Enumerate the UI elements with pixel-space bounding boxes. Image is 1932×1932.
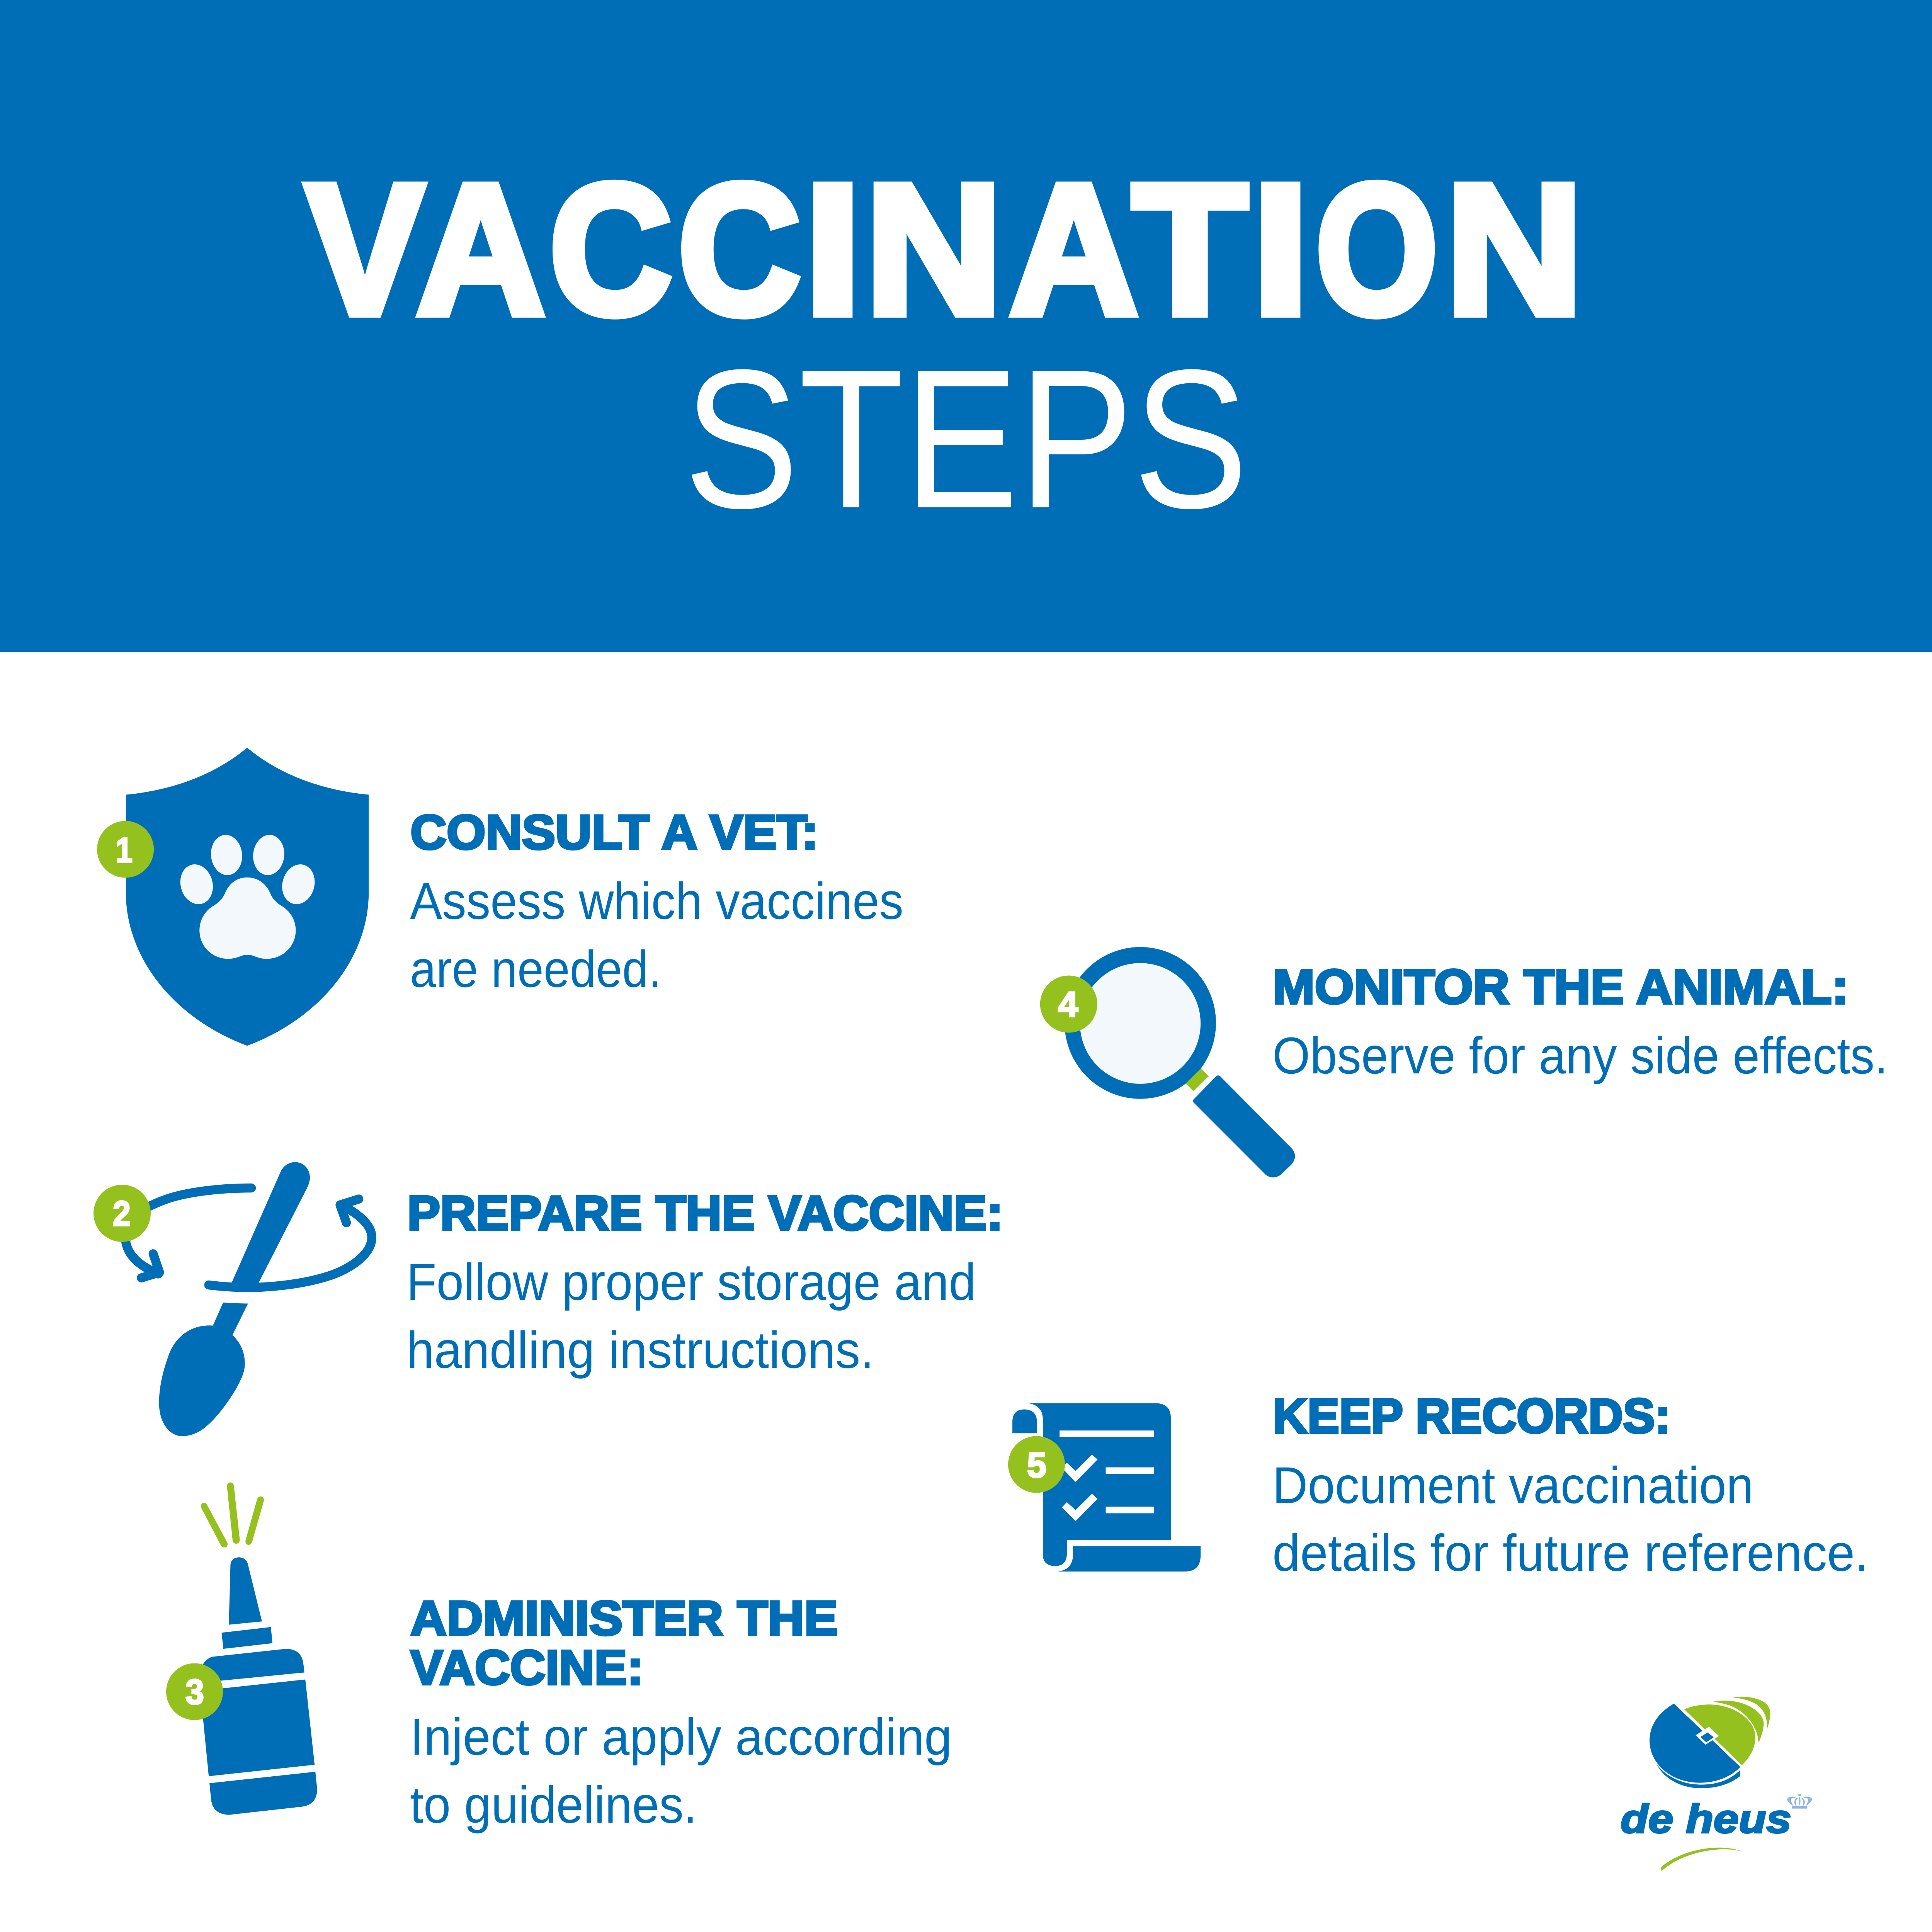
logo wordmark: de heus xyxy=(1621,1797,1791,1842)
title: vaccination: T xyxy=(1133,145,1247,353)
badge: number 3: 3 xyxy=(185,1672,204,1712)
badge: number 3 xyxy=(166,1663,223,1720)
badge: number 2 xyxy=(94,1185,151,1242)
step 1: consult a vet xyxy=(97,748,903,1046)
title: vaccination: O xyxy=(1316,145,1438,353)
badge: number 1 xyxy=(97,821,154,878)
text: observe for side effects: Observe for any side effects. xyxy=(1272,1027,1888,1085)
step 4: monitor the animal xyxy=(1040,947,1888,1177)
heading: consult a vet: CONSULT A VET: xyxy=(410,805,818,859)
heading: prepare the vaccine: PREPARE THE VACCINE: xyxy=(407,1186,1003,1240)
text: are needed: are needed. xyxy=(410,940,662,998)
text: assess vaccines: Assess which vaccines xyxy=(410,872,903,930)
title: vaccination: V xyxy=(306,145,425,353)
heading line 2: VACCINE: xyxy=(410,1640,643,1695)
title: vaccination: N xyxy=(1446,145,1583,353)
title: vaccination: C xyxy=(549,145,672,353)
icon: document scroll xyxy=(1012,1403,1201,1571)
title: vaccination: N xyxy=(865,145,1003,353)
title: steps: STEPS xyxy=(684,328,1248,549)
text: handling instructions: handling instructions. xyxy=(406,1321,874,1379)
badge: number 1: 1 xyxy=(116,831,133,870)
step 3: administer the vaccine xyxy=(166,1482,952,1834)
heading: monitor the animal: MONITOR THE ANIMAL: xyxy=(1273,959,1849,1014)
step 5: keep records xyxy=(1008,1389,1869,1582)
text: follow proper storage: Follow proper storage and xyxy=(406,1253,976,1311)
title: vaccination: C xyxy=(678,145,801,353)
logo crown xyxy=(1787,1794,1812,1809)
text: inject or apply: Inject or apply according xyxy=(410,1708,952,1766)
badge: number 4: 4 xyxy=(1058,985,1078,1024)
title: vaccination: I xyxy=(1252,145,1310,353)
heading: keep records: KEEP RECORDS: xyxy=(1273,1389,1671,1443)
text: details for future reference: details for future reference. xyxy=(1272,1524,1869,1582)
icon: magnifying glass xyxy=(1065,947,1295,1177)
icon: dropper bottle xyxy=(199,1482,317,1815)
badge: number 2: 2 xyxy=(113,1194,131,1233)
text: document vaccination: Document vaccination xyxy=(1272,1457,1753,1514)
logo: de heus xyxy=(1621,1697,1812,1871)
title: vaccination: A xyxy=(1010,145,1138,353)
badge: number 5 xyxy=(1008,1436,1065,1493)
badge: number 4 xyxy=(1040,976,1097,1033)
icon: shield with paw xyxy=(126,748,369,1046)
icon: spoon with stirring arrows xyxy=(126,1162,372,1436)
logo emblem xyxy=(1650,1697,1770,1871)
title: vaccination: I xyxy=(804,145,862,353)
header banner xyxy=(0,0,1932,652)
title: vaccination: A xyxy=(417,145,545,353)
heading: administer the vaccine: ADMINISTER THE xyxy=(410,1591,838,1645)
step 2: prepare the vaccine xyxy=(94,1162,1003,1436)
text: to guidelines: to guidelines. xyxy=(410,1776,697,1834)
badge: number 5: 5 xyxy=(1027,1446,1046,1485)
